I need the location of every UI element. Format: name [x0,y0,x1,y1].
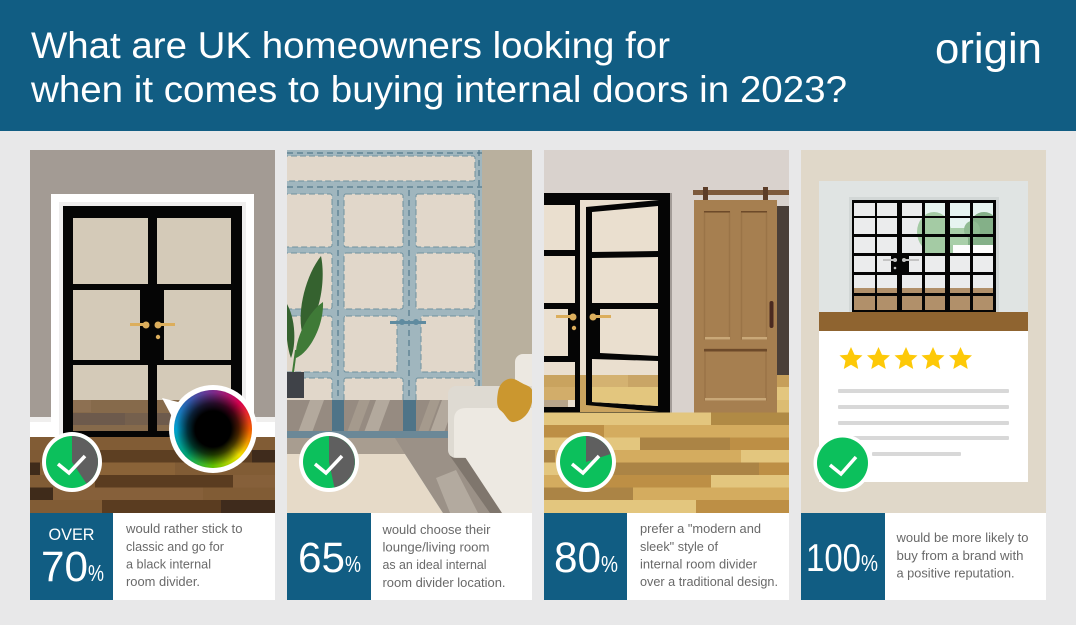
stat: 65%: would choose their [381,523,490,537]
floor and rug [287,400,502,513]
panel: modern vs traditional door illustration [544,150,789,513]
wooden floor [30,437,275,513]
title: What are UK homeowners looking for [31,25,670,66]
header banner [0,0,1076,131]
stat: over 70%: classic and go for [126,540,224,554]
five star rating [840,347,972,369]
title [30,25,847,110]
icon: pie check 65% [299,432,359,492]
wooden floor [544,412,789,513]
cushion [497,379,533,422]
stat: over 70%: OVER [48,526,95,544]
stat: 80%: 80 [554,534,601,582]
stat: 65%: lounge/living room [382,540,490,554]
stat: over 70% [30,513,275,600]
stat: 65%: room divider location. [382,576,506,590]
open black glass door [544,193,672,413]
door handles [130,322,175,339]
stat: 80%: prefer a "modern and [640,522,761,536]
stat: over 70%: room divider. [126,575,200,589]
stat: 100%: 100 [806,537,861,580]
stat: 65%: 65 [298,534,345,582]
plant [286,256,323,398]
icon: check 100% [814,434,872,492]
stat: 100%: % [861,550,878,576]
icon: colour wheel [162,385,257,473]
icon: pie check 80% [556,432,616,492]
stat: 65% [287,513,532,600]
traditional wooden door [693,187,789,413]
panel: living room illustration [280,150,548,513]
stat: 80%: % [601,551,618,577]
panel: black door illustration [30,150,275,513]
stat: over 70%: % [88,560,104,586]
gridded window door [852,200,999,312]
stat: 100% [801,513,1046,600]
stat: 80% [544,513,789,600]
black double door [63,206,242,437]
stat: 65%: % [345,551,361,577]
stat: 80%: sleek" style of [640,540,719,554]
stat: 80%: internal room divider [640,558,757,572]
stat: 100%: buy from a brand with [896,549,1024,563]
title: when it comes to buying internal doors in 2023? [30,69,847,110]
stat: 100%: would be more likely to [895,531,1029,545]
stat: over 70%: would rather stick to [125,522,243,536]
logo: origin: origin [935,26,1042,73]
sofa [448,354,532,513]
panel: brand reputation illustration [801,150,1046,513]
glass room divider [280,150,482,418]
stat: over 70%: a black internal [126,558,211,572]
stat: 65%: as an ideal internal [382,558,486,572]
icon: pie check 70% [42,432,102,492]
review text lines [838,389,1009,456]
stat: 100%: a positive reputation. [896,566,1014,580]
stat: 80%: over a traditional design. [640,575,778,589]
door handles [556,314,611,330]
stat: over 70%: 70 [41,543,88,591]
